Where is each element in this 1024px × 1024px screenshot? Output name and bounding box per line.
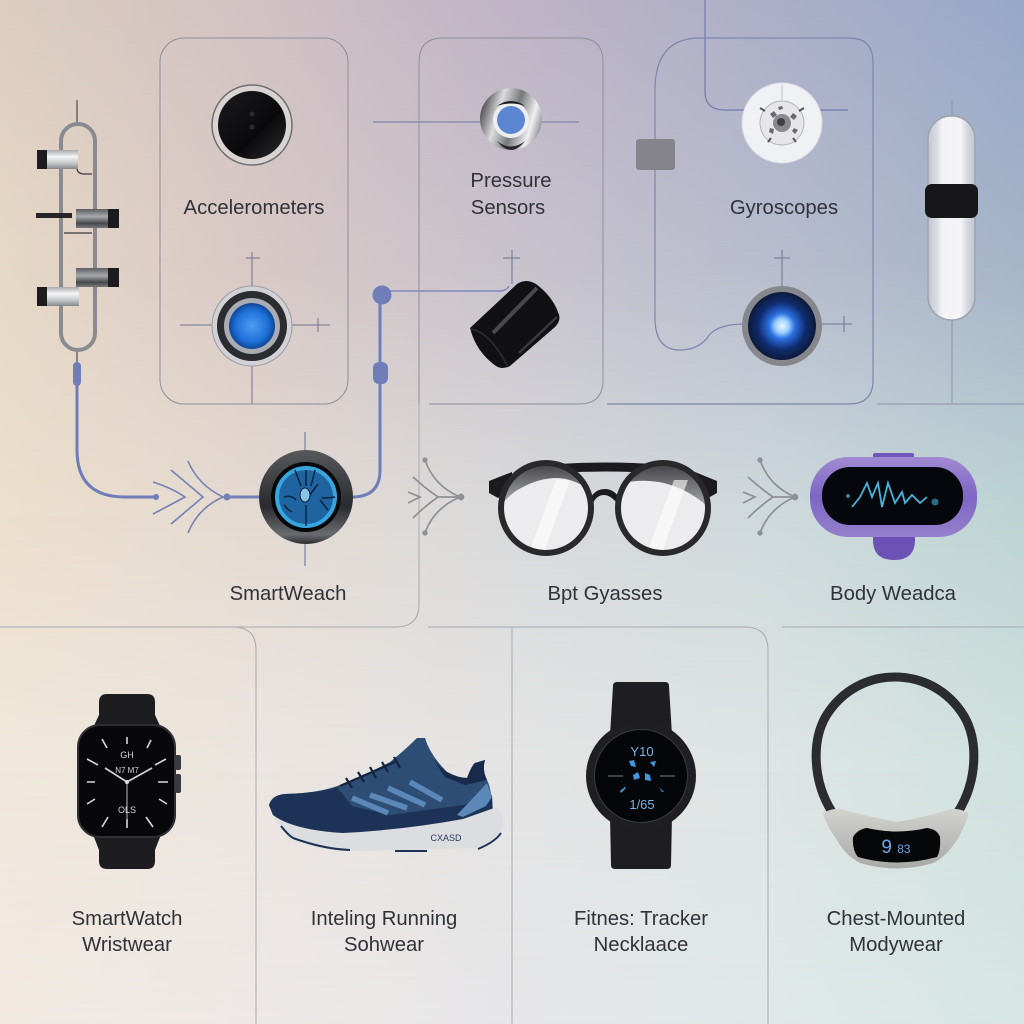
icon: running shoe — [269, 738, 503, 851]
label: chest band — [827, 908, 965, 956]
arrow: chevrons to band — [743, 458, 798, 535]
arrow: chevrons to glasses — [408, 458, 464, 535]
label: chest band: Chest-Mounted — [827, 908, 965, 930]
icon: grey chip — [636, 139, 675, 170]
label: running shoe: Sohwear — [344, 934, 424, 956]
panel: accelerometers — [160, 38, 348, 404]
divider: central frame — [0, 404, 1024, 1024]
icon: blue lens sensor — [180, 252, 330, 404]
label: sensors: Sensors — [471, 197, 545, 219]
icon: black cylinder — [470, 250, 559, 368]
label: smartwatch wristwear — [72, 908, 182, 956]
label: body wearable: Body Weadca — [830, 583, 957, 605]
icon: smartwatch wristwear: N7 M7 — [115, 766, 139, 775]
label: fitness tracker — [574, 908, 708, 956]
label: pressure sensors: Pressure — [470, 170, 552, 192]
label: fitness tracker: Necklaace — [594, 934, 688, 956]
panel: pressure sensors — [373, 38, 603, 404]
label: smartwatch wristwear: SmartWatch — [72, 908, 182, 930]
icon: smartwatch wristwear: OLS — [118, 805, 136, 815]
icon: accelerometer black disc — [212, 85, 292, 165]
icon: fitness tracker: Y10 — [630, 744, 654, 759]
panel: gyroscopes — [607, 0, 873, 404]
label: gyroscopes: Gyroscopes — [730, 197, 838, 219]
icon: smartwatch dial — [259, 432, 353, 566]
icon: sensor rail — [36, 100, 119, 364]
icon: chest band — [816, 677, 974, 868]
icon: gyroscope — [742, 83, 822, 163]
label: smartweach: SmartWeach — [230, 583, 346, 605]
icon: body wearable — [810, 453, 977, 560]
icon: glasses — [489, 450, 717, 553]
icon: fitness tracker — [586, 682, 696, 869]
panel: pill wearable — [877, 100, 1024, 404]
label: accelerometers: Accelerometers — [184, 197, 324, 219]
icon: smartwatch wristwear — [78, 694, 181, 869]
icon: fitness tracker: 1/65 — [629, 797, 655, 812]
icon: chest band: 9 83 — [881, 837, 911, 858]
icon: pressure sensor metal ring — [373, 88, 579, 150]
icon: glowing blue sensor — [742, 250, 852, 366]
label: running shoe — [311, 908, 457, 956]
label: glasses: Bpt Gyasses — [548, 583, 662, 605]
icon: smartwatch wristwear: GH — [120, 750, 134, 760]
label: running shoe: Inteling Running — [311, 908, 457, 930]
connector: rail to smartwatch — [73, 362, 260, 533]
label: fitness tracker: Fitnes: Tracker — [574, 908, 708, 930]
connector: sensor to smartwatch — [352, 286, 509, 497]
label: chest band: Modywear — [849, 934, 943, 956]
icon: running shoe: CXASD — [430, 833, 462, 843]
icon: black band — [925, 184, 978, 218]
label: smartwatch wristwear: Wristwear — [82, 934, 172, 956]
